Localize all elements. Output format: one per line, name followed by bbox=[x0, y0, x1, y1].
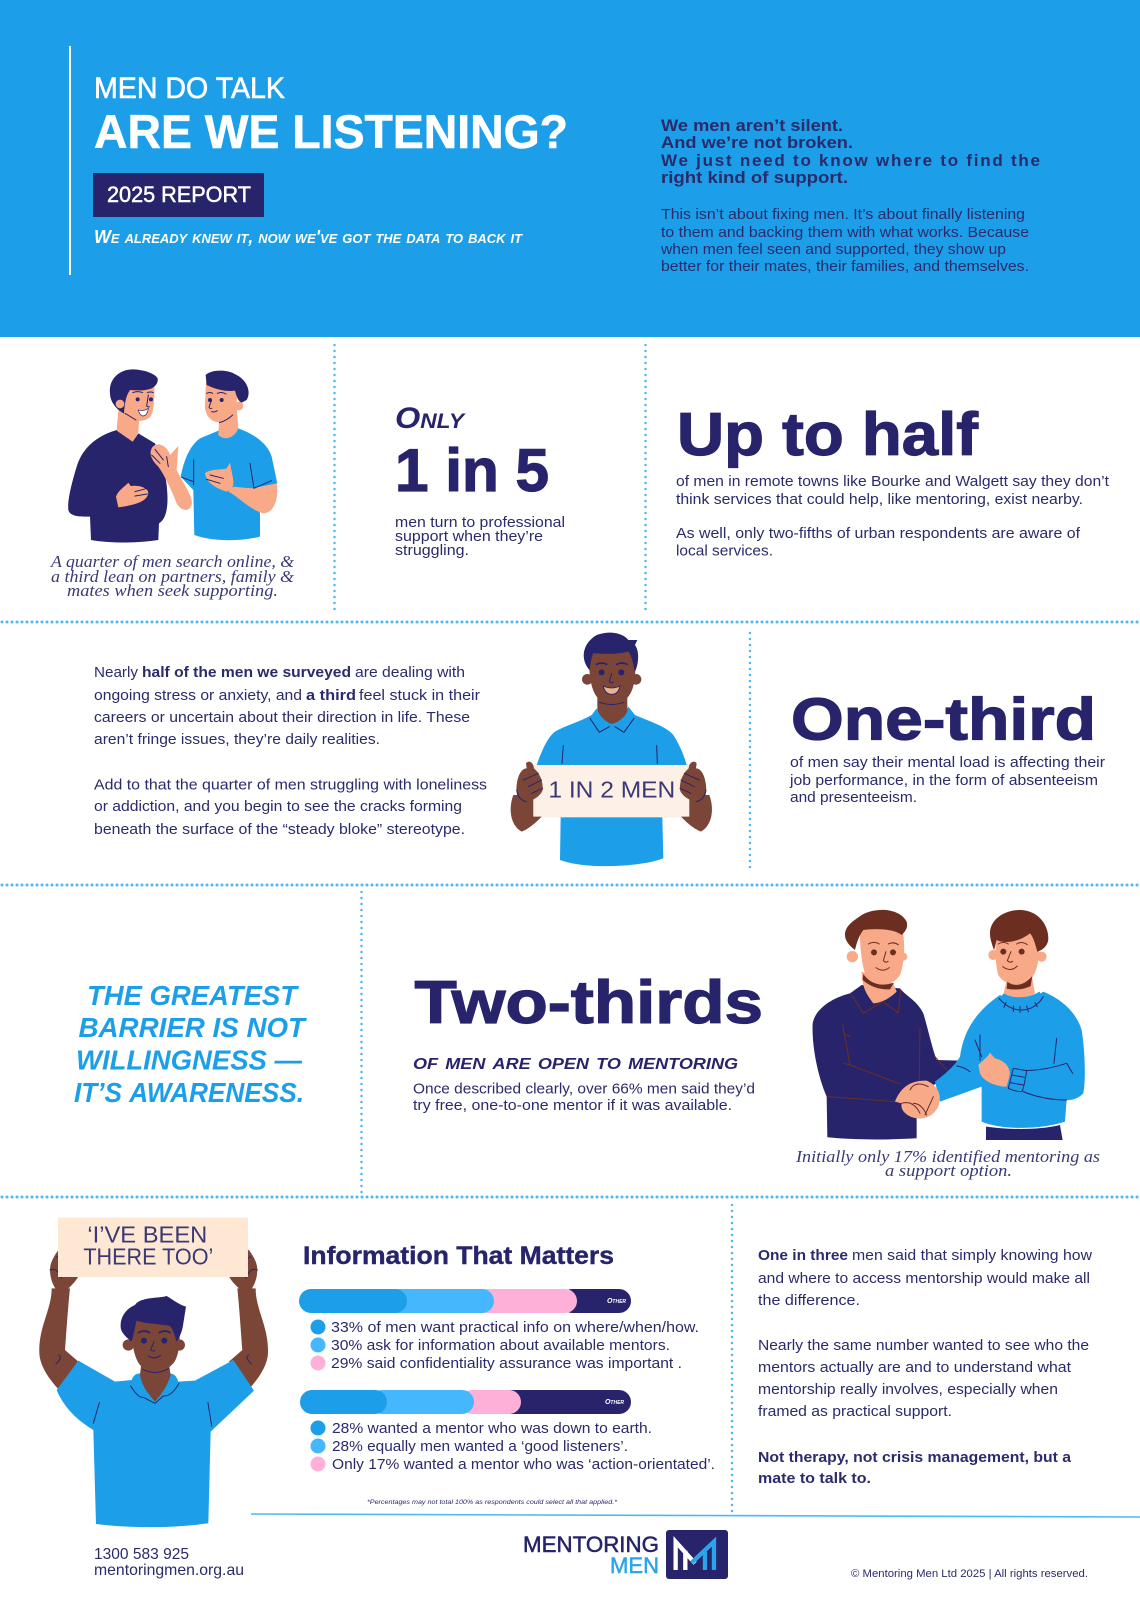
caption: where men seek support: mates when seek supporting. bbox=[67, 581, 278, 600]
logo: mentoring men: MEN bbox=[610, 1553, 659, 1578]
panel: information that matters bbox=[299, 1242, 715, 1506]
text block: mentorship findings: mentors actually are and to understand what bbox=[758, 1359, 1072, 1376]
panel: one-third statistic: One-third bbox=[791, 686, 1096, 752]
panel: 1 in 5 statistic: support when they’re bbox=[395, 528, 543, 545]
sign: i've been there too bbox=[58, 1218, 248, 1277]
text block: mentorship findings: the difference. bbox=[758, 1292, 860, 1309]
panel: header banner bbox=[0, 0, 1140, 337]
text block: mentorship findings: Nearly the same number wanted to see who the bbox=[758, 1337, 1089, 1354]
panel: 1 in 5 statistic bbox=[395, 402, 565, 559]
intro body text bbox=[660, 206, 1029, 275]
callout: greatest barrier: it’s awareness. bbox=[74, 1067, 304, 1111]
icon: two men shaking hands bbox=[813, 910, 1085, 1140]
intro statement: And we’re not broken. bbox=[661, 133, 853, 152]
caption: where men seek support: A quarter of men search online, & bbox=[50, 552, 295, 571]
stacked bar: information wanted bbox=[299, 1289, 631, 1313]
text block: mentorship findings: and where to access mentorship would make all bbox=[758, 1270, 1090, 1287]
caption: initial mentoring awareness: a support option. bbox=[885, 1161, 1012, 1180]
text block: stress and anxiety: or addiction, and you begin to see the cracks forming bbox=[94, 798, 462, 815]
text block: stress and anxiety: are dealing with bbox=[355, 664, 465, 681]
panel: 1 in 5 statistic: men turn to professional bbox=[395, 514, 565, 531]
text block: stress and anxiety: careers or uncertain about their direction in life. These bbox=[94, 709, 470, 726]
panel: two-thirds statistic: of men are open to mentoring bbox=[413, 1048, 738, 1074]
text block: stress and anxiety: beneath the surface of the “steady bloke” stereotype. bbox=[94, 821, 465, 838]
legend: mentor qualities: Only 17% wanted a mentor who was ‘action-orientated’. bbox=[332, 1456, 715, 1473]
heading: Information That Matters bbox=[303, 1242, 614, 1270]
intro body text: This isn’t about fixing men. It’s about finally listening bbox=[661, 206, 1025, 223]
callout: greatest barrier bbox=[74, 970, 308, 1111]
panel: two-thirds statistic: Once described clearly, over 66% men said they’d bbox=[413, 1080, 755, 1098]
callout: greatest barrier: barrier is not bbox=[78, 1002, 308, 1046]
text block: stress and anxiety: a third bbox=[306, 687, 356, 704]
contact details: 1300 583 925 bbox=[94, 1546, 189, 1563]
panel: two-thirds statistic: Two-thirds bbox=[414, 969, 763, 1036]
report badge: 2025 REPORT bbox=[107, 182, 251, 207]
contact details bbox=[94, 1546, 244, 1579]
text block: mentorship findings: One in three bbox=[758, 1247, 848, 1264]
title bbox=[94, 72, 568, 158]
intro statement: We just need to know where to find the bbox=[661, 151, 1040, 170]
stacked bar: information wanted: Other bbox=[607, 1298, 626, 1305]
panel: two-thirds statistic: try free, one-to-one mentor if it was available. bbox=[413, 1097, 732, 1114]
callout: greatest barrier: The greatest bbox=[87, 970, 300, 1014]
panel: one-third statistic: job performance, in the form of absenteeism bbox=[789, 772, 1098, 789]
legend: information wanted bbox=[310, 1319, 699, 1372]
stacked bar: mentor qualities bbox=[300, 1390, 631, 1414]
icon: man holding 1 in 2 men sign bbox=[511, 633, 712, 866]
text block: mentorship findings: Not therapy, not crisis management, but a bbox=[758, 1449, 1072, 1466]
panel: up to half statistic bbox=[676, 401, 1110, 560]
copyright: © Mentoring Men Ltd 2025 | All rights reserved. bbox=[851, 1568, 1088, 1580]
intro body text: better for their mates, their families, and themselves. bbox=[661, 258, 1029, 275]
legend: mentor qualities: 28% wanted a mentor who was down to earth. bbox=[332, 1420, 652, 1437]
panel: 1 in 5 statistic: Only bbox=[395, 402, 466, 435]
caption: where men seek support: a third lean on partners, family & bbox=[51, 567, 295, 586]
panel: one-third statistic: of men say their mental load is affecting their bbox=[790, 754, 1105, 771]
text block: stress and anxiety: feel stuck in their bbox=[359, 687, 480, 704]
logo: mentoring men: MENTORING bbox=[523, 1532, 659, 1557]
sign: 1 in 2 men bbox=[534, 765, 690, 817]
panel: up to half statistic: local services. bbox=[676, 542, 773, 560]
intro body text: when men feel seen and supported, they show up bbox=[660, 241, 1006, 258]
caption: initial mentoring awareness: Initially only 17% identified mentoring as bbox=[795, 1147, 1100, 1166]
legend: information wanted: 33% of men want practical info on where/when/how. bbox=[331, 1319, 699, 1336]
text block: stress and anxiety: Add to that the quarter of men struggling with loneliness bbox=[94, 776, 487, 794]
intro statement: We men aren’t silent. bbox=[661, 116, 843, 135]
panel: up to half statistic: of men in remote towns like Bourke and Walgett say they don’t bbox=[676, 473, 1110, 490]
panel: up to half statistic: Up to half bbox=[677, 401, 979, 468]
panel: up to half statistic: As well, only two-fifths of urban respondents are aware of bbox=[676, 525, 1081, 542]
text block: mentorship findings: mentorship really involves, especially when bbox=[758, 1381, 1058, 1398]
intro statement bbox=[661, 116, 1040, 187]
tagline: We already knew it, now we've got the data to back it bbox=[94, 227, 523, 247]
text block: stress and anxiety: ongoing stress or anxiety, and bbox=[94, 687, 302, 704]
sign: i've been there too: ‘I’VE BEEN bbox=[87, 1222, 207, 1248]
sign: i've been there too: THERE TOO’ bbox=[83, 1243, 213, 1269]
contact details: mentoringmen.org.au bbox=[94, 1562, 244, 1579]
intro statement: right kind of support. bbox=[661, 168, 848, 187]
sign: 1 in 2 men: 1 IN 2 MEN bbox=[548, 777, 675, 803]
caption: initial mentoring awareness bbox=[795, 1147, 1100, 1180]
text block: mentorship findings: framed as practical support. bbox=[758, 1403, 952, 1420]
text block: stress and anxiety bbox=[94, 664, 487, 838]
intro body text: to them and backing them with what works. Because bbox=[661, 224, 1029, 241]
panel: 1 in 5 statistic: struggling. bbox=[395, 542, 469, 559]
callout: greatest barrier: willingness — bbox=[76, 1034, 303, 1078]
panel: up to half statistic: think services that could help, like mentoring, exist nearby. bbox=[676, 491, 1083, 508]
icon: man holding sign overhead bbox=[39, 1218, 268, 1527]
legend: information wanted: 29% said confidentiality assurance was important . bbox=[331, 1355, 682, 1372]
text block: stress and anxiety: half of the men we surveyed bbox=[142, 664, 351, 681]
text block: stress and anxiety: aren’t fringe issues, they’re daily realities. bbox=[94, 731, 380, 748]
legend: mentor qualities bbox=[310, 1420, 715, 1473]
panel: two-thirds statistic bbox=[413, 969, 763, 1114]
panel: one-third statistic bbox=[789, 686, 1105, 806]
text block: mentorship findings bbox=[758, 1247, 1092, 1487]
legend: mentor qualities: 28% equally men wanted a ‘good listeners’. bbox=[332, 1438, 628, 1455]
stacked bar: mentor qualities: Other bbox=[605, 1399, 624, 1406]
text block: stress and anxiety: Nearly bbox=[94, 664, 138, 681]
panel: one-third statistic: and presenteeism. bbox=[790, 789, 917, 806]
caption: where men seek support bbox=[50, 552, 295, 600]
logo: mentoring men bbox=[523, 1530, 728, 1579]
legend: information wanted: 30% ask for information about available mentors. bbox=[331, 1337, 670, 1354]
text block: mentorship findings: mate to talk to. bbox=[758, 1470, 871, 1487]
panel: 1 in 5 statistic: 1 in 5 bbox=[395, 437, 549, 504]
footnote: *Percentages may not total 100% as respondents could select all that applied.* bbox=[367, 1499, 618, 1506]
text block: mentorship findings: men said that simply knowing how bbox=[852, 1247, 1092, 1264]
title: MEN DO TALK bbox=[94, 72, 285, 105]
icon: two men talking bbox=[68, 369, 277, 542]
title: ARE WE LISTENING? bbox=[94, 105, 568, 158]
report badge bbox=[93, 173, 264, 217]
